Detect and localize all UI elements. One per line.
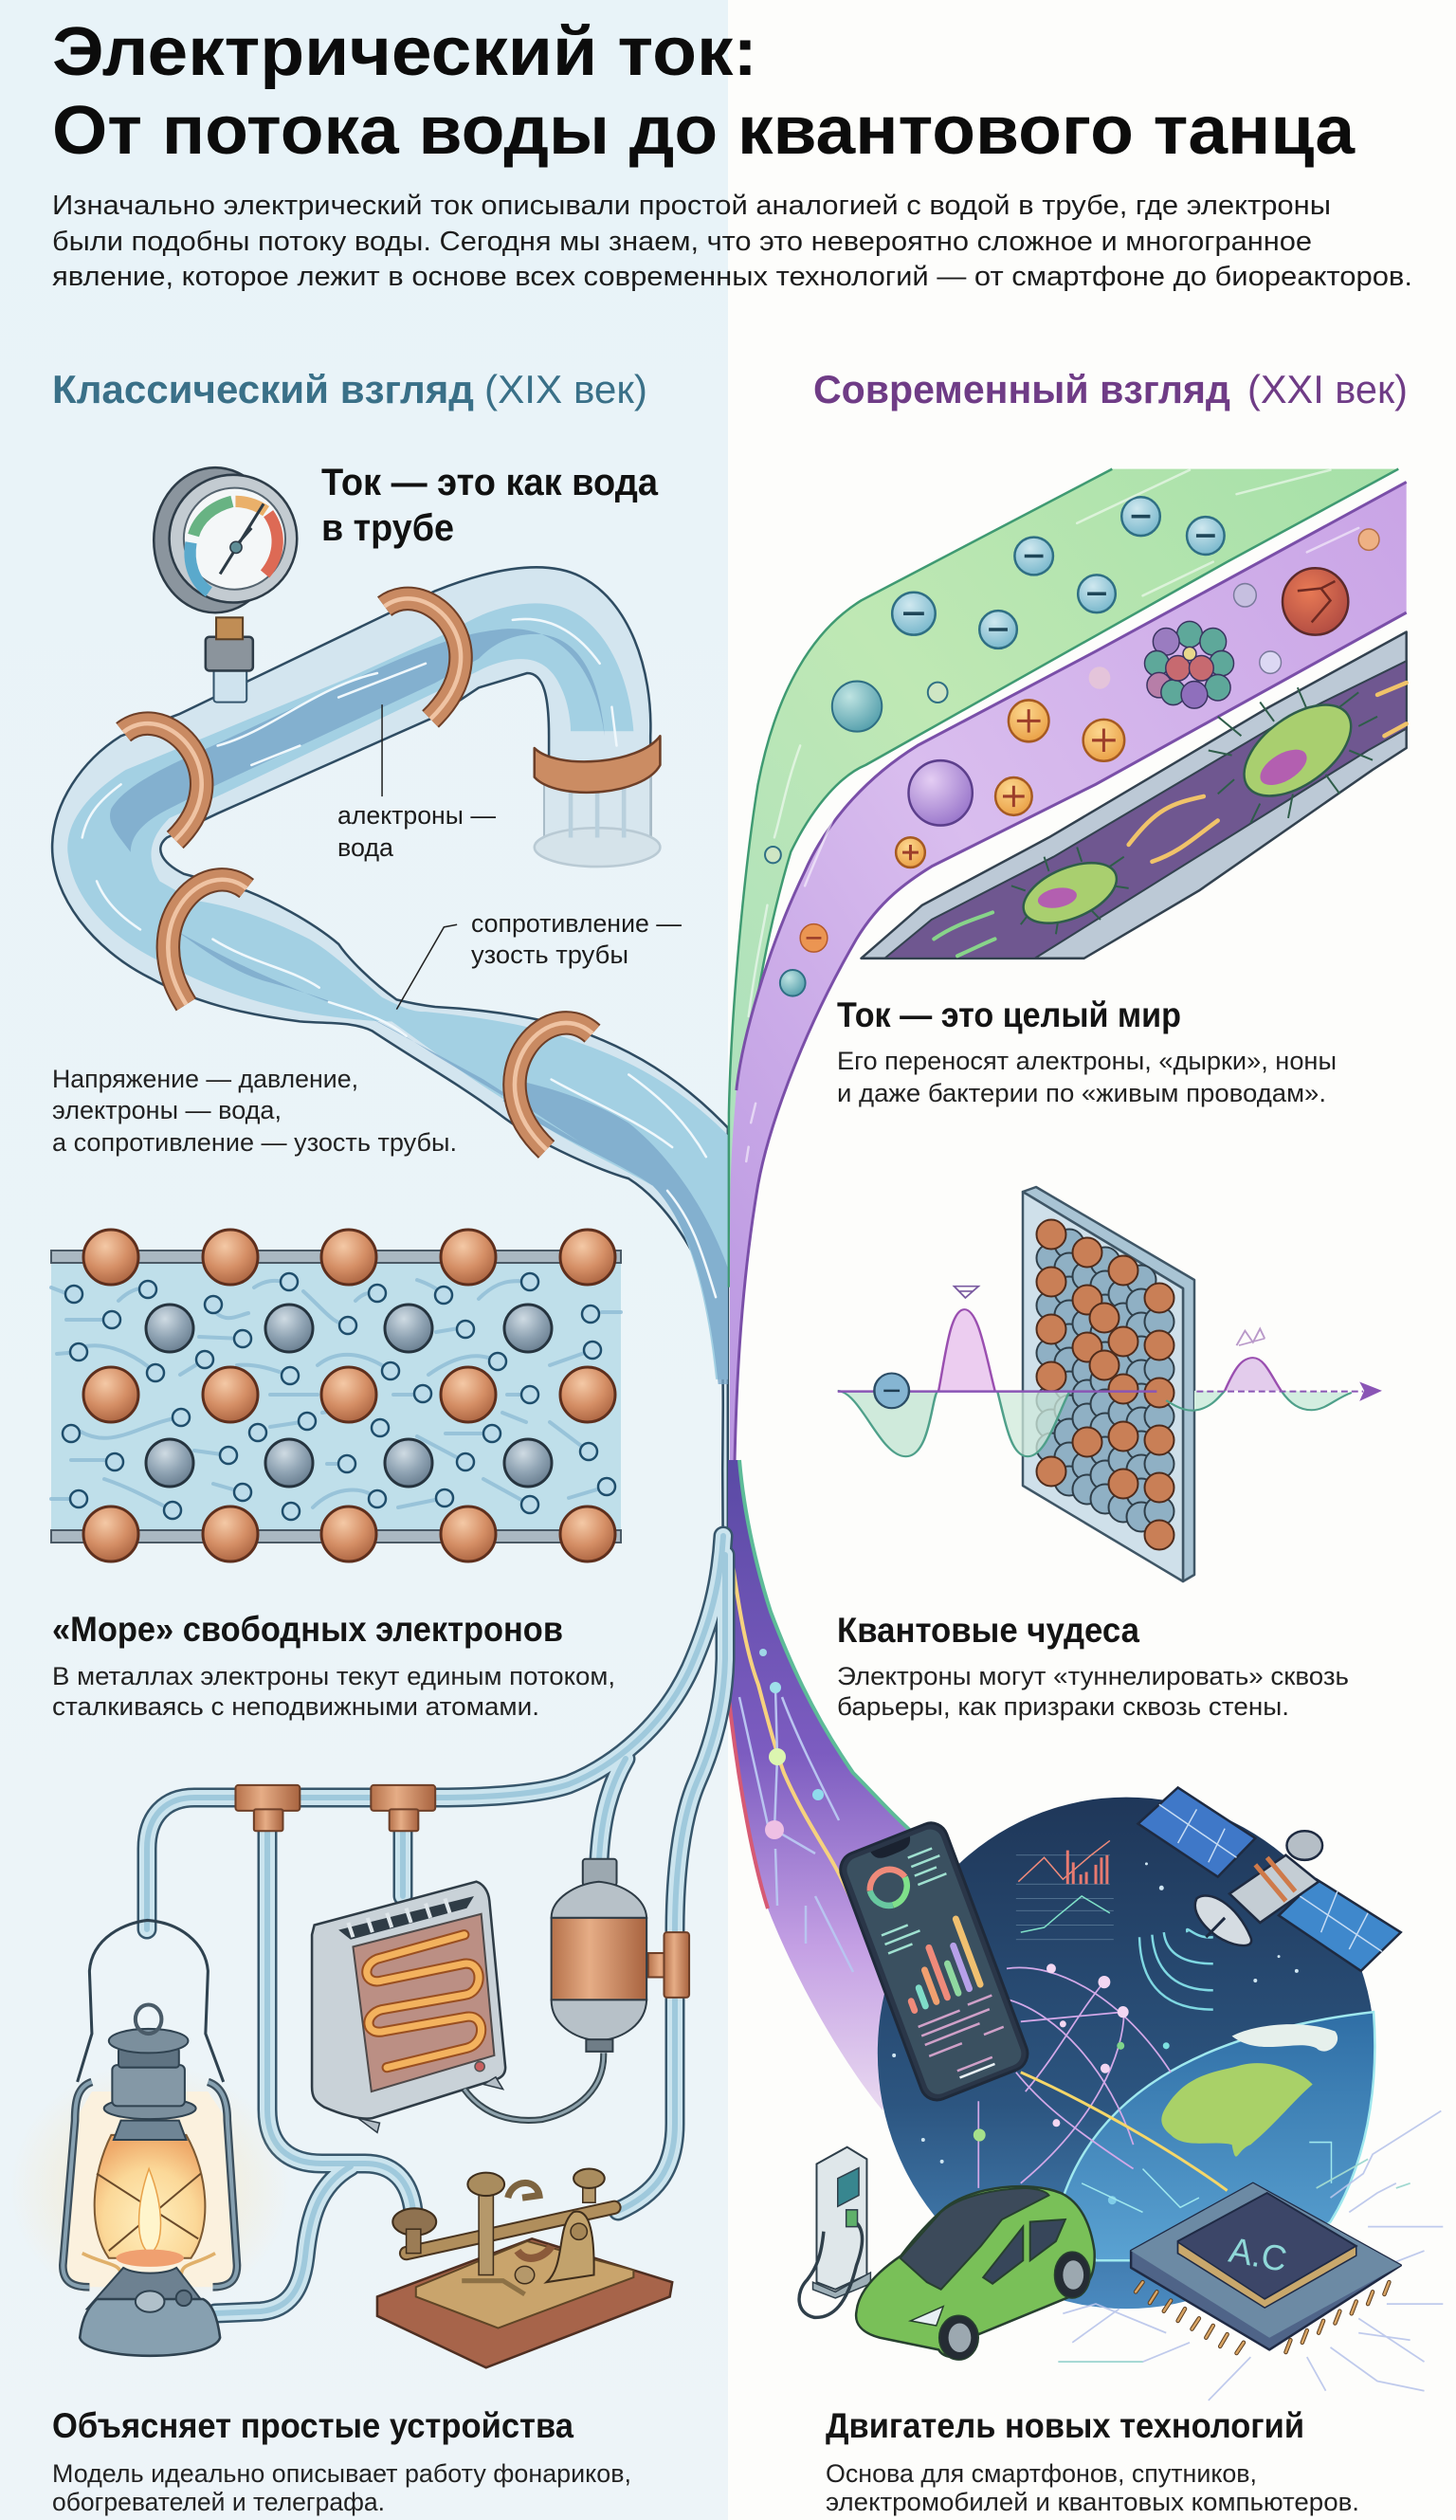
metal channel: [51, 1251, 621, 1543]
water highlights: [82, 619, 716, 1297]
holes: plus charges: [896, 700, 1124, 867]
fixed grey atoms: [146, 1305, 552, 1487]
heading: classical view: Классический взгляд: [52, 367, 474, 411]
text: sea of free electrons: [52, 1610, 615, 1721]
text: explains simple devices: обогревателей и телеграфа.: [52, 2488, 385, 2516]
text: explains simple devices: Объясняет простые устройства: [52, 2406, 573, 2445]
title: Электрический ток:: [52, 14, 757, 90]
title: От потока воды до квантового танца: [52, 93, 1356, 169]
heading: current like water: в трубе: [321, 507, 454, 549]
wave markers: [955, 1287, 978, 1298]
label: electrons are water: алектроны —: [337, 801, 496, 830]
purple ion band: [730, 482, 1407, 1500]
tee fittings: [235, 1785, 435, 1831]
water: [67, 603, 728, 1379]
flagellates: [1129, 683, 1407, 862]
network nodes: [974, 1963, 1170, 2204]
darker water band: [110, 629, 728, 1384]
teal ions: [765, 682, 948, 996]
signal waves: [1139, 1929, 1213, 2010]
molecule cluster: [1144, 621, 1234, 708]
illustration: simple devices on water tubes: [9, 1536, 725, 2367]
illustration: quantum tunnelling: [838, 1187, 1382, 1581]
text: sea of free electrons: «Море» свободных электронов: [52, 1610, 563, 1649]
intro text: [52, 191, 1412, 292]
electron: [874, 1373, 909, 1408]
label: resistance: [471, 909, 682, 969]
heading: current like water: Ток — это как вода: [321, 462, 659, 503]
other ions: [800, 529, 1379, 952]
purple band edges: [735, 482, 1407, 1470]
panel: left background: [0, 0, 728, 2520]
icon: pressure gauge: [154, 467, 297, 703]
earth: [1063, 2012, 1374, 2260]
text: current is a whole world: и даже бактерии по «живым проводам».: [837, 1079, 1326, 1107]
space disc: [878, 1798, 1375, 2309]
text: engine of new technologies: Двигатель новых технологий: [826, 2406, 1304, 2445]
icon: electric car: [856, 2186, 1095, 2360]
text: engine of new technologies: Основа для смартфонов, спутников,: [826, 2459, 1257, 2488]
text: current is a whole world: Ток — это целый мир: [837, 995, 1181, 1034]
text: explains simple devices: [52, 2406, 631, 2516]
text: sea of free electrons: В металлах электроны текут единым потоком,: [52, 1662, 615, 1690]
label: electrons are water: вода: [337, 833, 394, 862]
stars: [892, 1862, 1299, 2164]
text: quantum wonders: Электроны могут «туннелировать» сквозь: [837, 1662, 1349, 1690]
lower trace lines on earth: [1082, 2143, 1331, 2212]
tubes: [147, 1536, 725, 2313]
text: engine of new technologies: электромобилей и квантовых компьютеров.: [826, 2488, 1359, 2516]
label: resistance: сопротивление —: [471, 909, 682, 938]
text: analogy summary: [52, 1065, 457, 1157]
text: sea of free electrons: сталкиваясь с неподвижными атомами.: [52, 1692, 539, 1721]
text: quantum wonders: барьеры, как призраки сквозь стены.: [837, 1692, 1289, 1721]
intro text: были подобны потоку воды. Сегодня мы знаем, что это невероятно сложное и многогранное: [52, 227, 1312, 257]
floating charts: [1016, 1840, 1114, 1940]
barrier lattice: grey atoms: [1037, 1229, 1174, 1532]
text: current is a whole world: [837, 995, 1337, 1107]
label: resistance: узость трубы: [471, 940, 628, 969]
text: quantum wonders: Квантовые чудеса: [837, 1611, 1139, 1650]
intro text: явление, которое лежит в основе всех современных технологий — от смартфоне до биореакторов.: [52, 262, 1412, 292]
electrons: [892, 497, 1225, 648]
callout line: electrons: [381, 704, 384, 796]
illustration: transparent water pipe: [52, 467, 728, 1555]
network arcs: [978, 1967, 1171, 2188]
copper rings: [123, 598, 592, 1150]
barrier plate: [1023, 1187, 1194, 1581]
phone ring chart: [864, 1864, 913, 1911]
text: explains simple devices: Модель идеально описывает работу фонариков,: [52, 2459, 631, 2488]
heading: modern view: (XXI век): [1247, 367, 1408, 411]
icon: copper cell: [552, 1859, 689, 2052]
heading: current like water: [321, 462, 659, 549]
glass pipe body: [52, 567, 728, 1555]
icon: electric heater: [312, 1882, 604, 2132]
icon: telegraph key: [377, 2169, 672, 2367]
icon: oil lantern: [9, 1920, 290, 2356]
icon: satellite: [1138, 1787, 1401, 1971]
heading: classical view: (XIX век): [484, 367, 647, 411]
icon: smartphone: [836, 1818, 1032, 2105]
copper ring on outlet: [535, 736, 660, 793]
illustration: modern technologies: [799, 1787, 1443, 2401]
text: analogy summary: электроны — вода,: [52, 1096, 282, 1124]
electron flow streaks: [51, 1280, 621, 1510]
title: [52, 14, 1356, 169]
icon: charging station: [799, 2147, 870, 2317]
intro text: Изначально электрический ток описывали простой аналогией с водой в трубе, где электроны: [52, 191, 1331, 221]
living wire: [861, 632, 1407, 959]
copper atoms: [83, 1230, 615, 1561]
green electron band: [729, 469, 1398, 1287]
icon: microchip: A.C: [1226, 2229, 1290, 2279]
illustration: ribbons of charge carriers: [729, 469, 1407, 1500]
illustration: electron sea in metal: [51, 1230, 621, 1561]
text: engine of new technologies: [826, 2406, 1359, 2516]
text: quantum wonders: [837, 1611, 1349, 1721]
free electrons: [63, 1273, 615, 1520]
outlet end: [535, 775, 660, 867]
panel: right background: [728, 0, 1456, 2520]
text: analogy summary: а сопротивление — узость трубы.: [52, 1128, 457, 1157]
phone bar chart: [890, 1919, 980, 2010]
barrier lattice: copper atoms: [1037, 1219, 1174, 1549]
green band edges: [729, 469, 1398, 1287]
arrow: propagation axis: [838, 1389, 1156, 1395]
icon: microchip: [1131, 2183, 1401, 2353]
circuit traces: [1058, 2110, 1443, 2401]
wave function: [838, 1287, 1382, 1456]
bacterium: large: [1209, 686, 1377, 823]
label: electrons are water: [337, 801, 496, 862]
band highlights: [746, 470, 1358, 1161]
text: analogy summary: Напряжение — давление,: [52, 1065, 358, 1093]
text: current is a whole world: Его переносят алектроны, «дырки», ноны: [837, 1047, 1337, 1075]
callout line: resistance: [396, 924, 457, 1010]
heading: modern view: Современный взгляд: [813, 367, 1230, 411]
illustration: ribbon tail toward technology: [728, 1460, 948, 2110]
bacterium: small: [1011, 848, 1129, 936]
